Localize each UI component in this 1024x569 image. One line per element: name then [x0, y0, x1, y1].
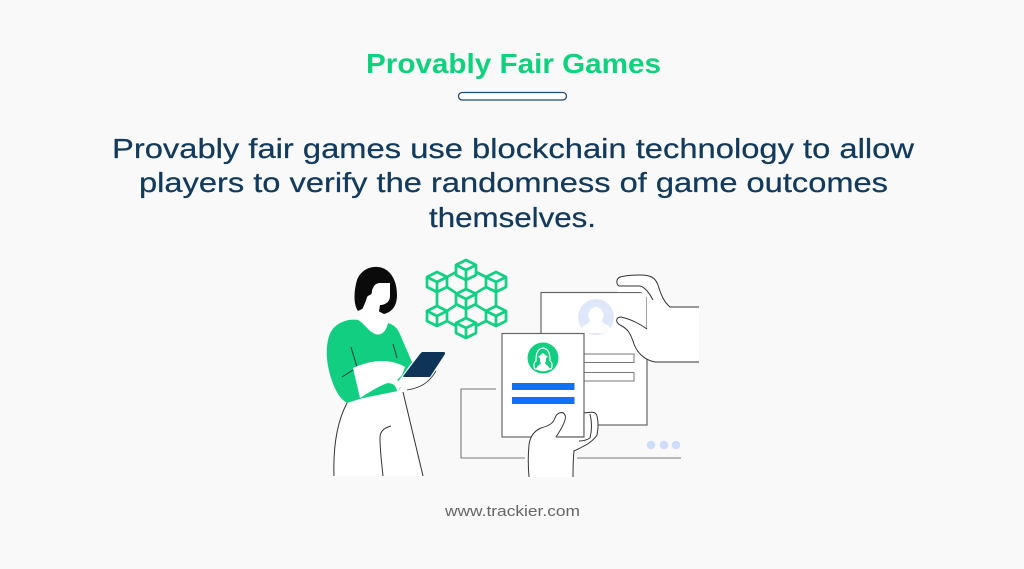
lower hand	[528, 412, 598, 477]
background frame line	[461, 389, 681, 458]
title underline	[458, 92, 566, 100]
avatar: faded	[578, 299, 614, 335]
front document	[502, 334, 584, 437]
dots	[647, 441, 680, 449]
right hand	[617, 275, 699, 362]
description text: players to verify the randomness of game outcomes	[139, 167, 888, 198]
trousers	[334, 392, 423, 476]
title: Provably Fair Games	[366, 48, 661, 79]
description text: Provably fair games use blockchain technology to allow	[112, 133, 914, 164]
neck and face	[358, 283, 390, 335]
arm and hand	[353, 361, 405, 398]
blue bars	[512, 383, 574, 390]
hair	[354, 267, 397, 314]
description text: themselves.	[429, 202, 596, 233]
tablet	[403, 352, 445, 377]
woman with tablet	[327, 267, 445, 476]
back document	[541, 292, 647, 425]
description text	[112, 133, 914, 233]
sweater	[327, 320, 412, 403]
avatar: green	[528, 342, 558, 374]
text lines	[580, 354, 634, 362]
icon: blockchain network	[427, 260, 506, 338]
footer url: www.trackier.com	[444, 503, 580, 520]
